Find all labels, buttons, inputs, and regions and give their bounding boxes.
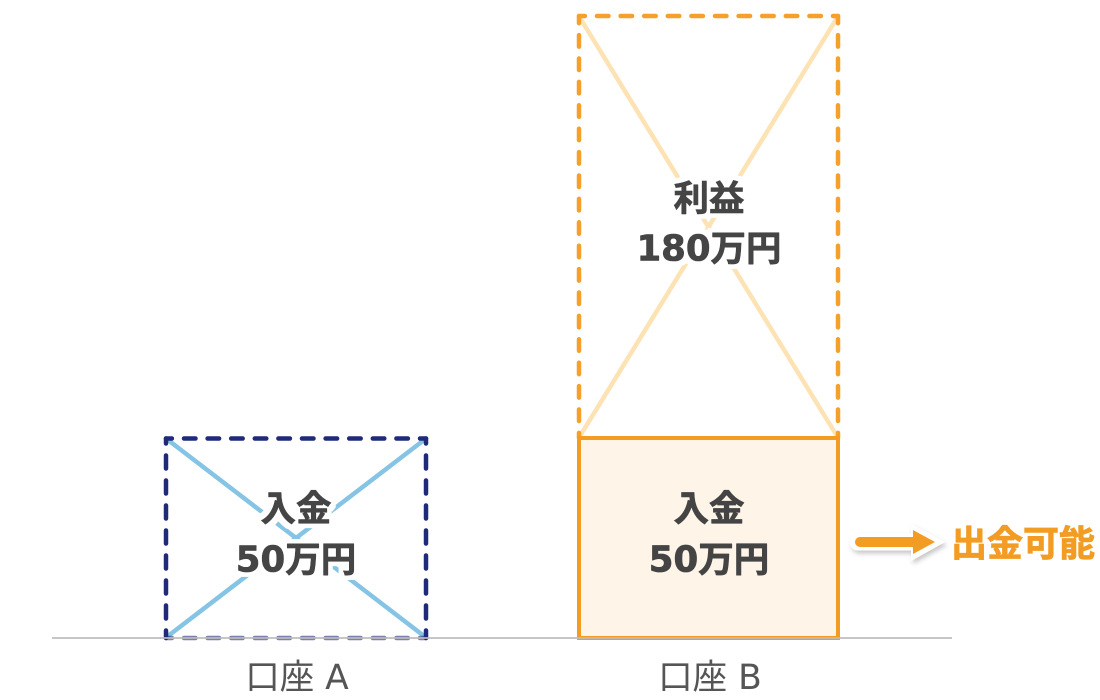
label: withdrawable: 出金可能 bbox=[951, 524, 1095, 565]
label: profit: 利益 bbox=[673, 178, 745, 220]
crossed-out cross lines A bbox=[168, 440, 424, 636]
baseline bbox=[52, 637, 952, 639]
label: deposit B: 入金 bbox=[673, 488, 745, 530]
amount: profit: 180万円 bbox=[636, 228, 782, 270]
panel: account A bbox=[166, 438, 426, 638]
faded cross lines profit bbox=[580, 18, 837, 436]
label: account A: 口座 A bbox=[245, 658, 349, 698]
amount: deposit A: 50万円 bbox=[236, 540, 356, 580]
dashed box profit bbox=[579, 16, 838, 438]
label: deposit A: 入金 bbox=[260, 488, 332, 530]
panel: account B bbox=[579, 16, 838, 638]
dashed box A bbox=[166, 438, 426, 638]
arrow: to withdrawable bbox=[850, 524, 945, 561]
solid box deposit B bbox=[579, 438, 838, 638]
label: account B: 口座 B bbox=[658, 658, 762, 698]
amount: deposit B: 50万円 bbox=[649, 540, 769, 580]
